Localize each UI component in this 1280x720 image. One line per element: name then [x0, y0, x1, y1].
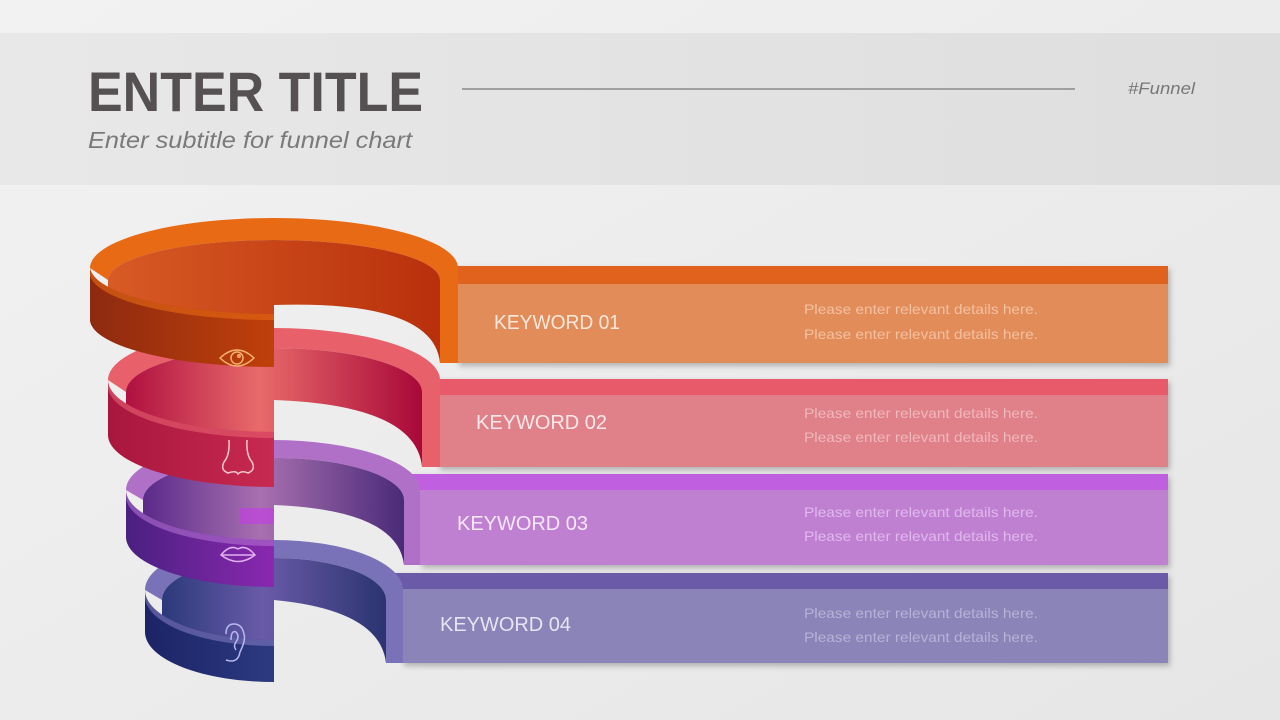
- level 2: [108, 328, 1168, 487]
- bar 3: [404, 474, 1168, 565]
- icon: lips: [221, 547, 255, 562]
- bar 2: [422, 379, 1168, 467]
- level 1: [90, 218, 1168, 367]
- icon: eye: [220, 350, 254, 366]
- ring 1: [90, 218, 458, 367]
- subtitle: Enter subtitle for funnel chart: [88, 127, 414, 153]
- bar 3: Please enter relevant details here.: [804, 528, 1038, 544]
- bar 3: KEYWORD 03: [457, 513, 588, 535]
- bar 1: KEYWORD 01: [494, 312, 620, 334]
- tag: #Funnel: [1128, 79, 1196, 98]
- level 3: [126, 440, 1168, 587]
- level 4: [145, 540, 1168, 682]
- bar 1: Please enter relevant details here.: [804, 326, 1038, 342]
- header band: [0, 33, 1280, 185]
- bar 1: Please enter relevant details here.: [804, 301, 1038, 317]
- bar 2: Please enter relevant details here.: [804, 405, 1038, 421]
- bar 2: Please enter relevant details here.: [804, 429, 1038, 445]
- bar 4: [386, 573, 1168, 663]
- ring 2: [108, 328, 440, 487]
- bar 3: Please enter relevant details here.: [804, 504, 1038, 520]
- icon: ear: [226, 624, 244, 661]
- icon: nose: [223, 440, 253, 474]
- bar 4: KEYWORD 04: [440, 614, 571, 636]
- bar 1: [440, 266, 1168, 363]
- title: ENTER TITLE: [88, 60, 423, 123]
- bar 2: KEYWORD 02: [476, 412, 607, 434]
- bar 4: Please enter relevant details here.: [804, 629, 1038, 645]
- ring 3: [126, 440, 420, 587]
- bar 4: Please enter relevant details here.: [804, 605, 1038, 621]
- ring 4: [145, 540, 403, 682]
